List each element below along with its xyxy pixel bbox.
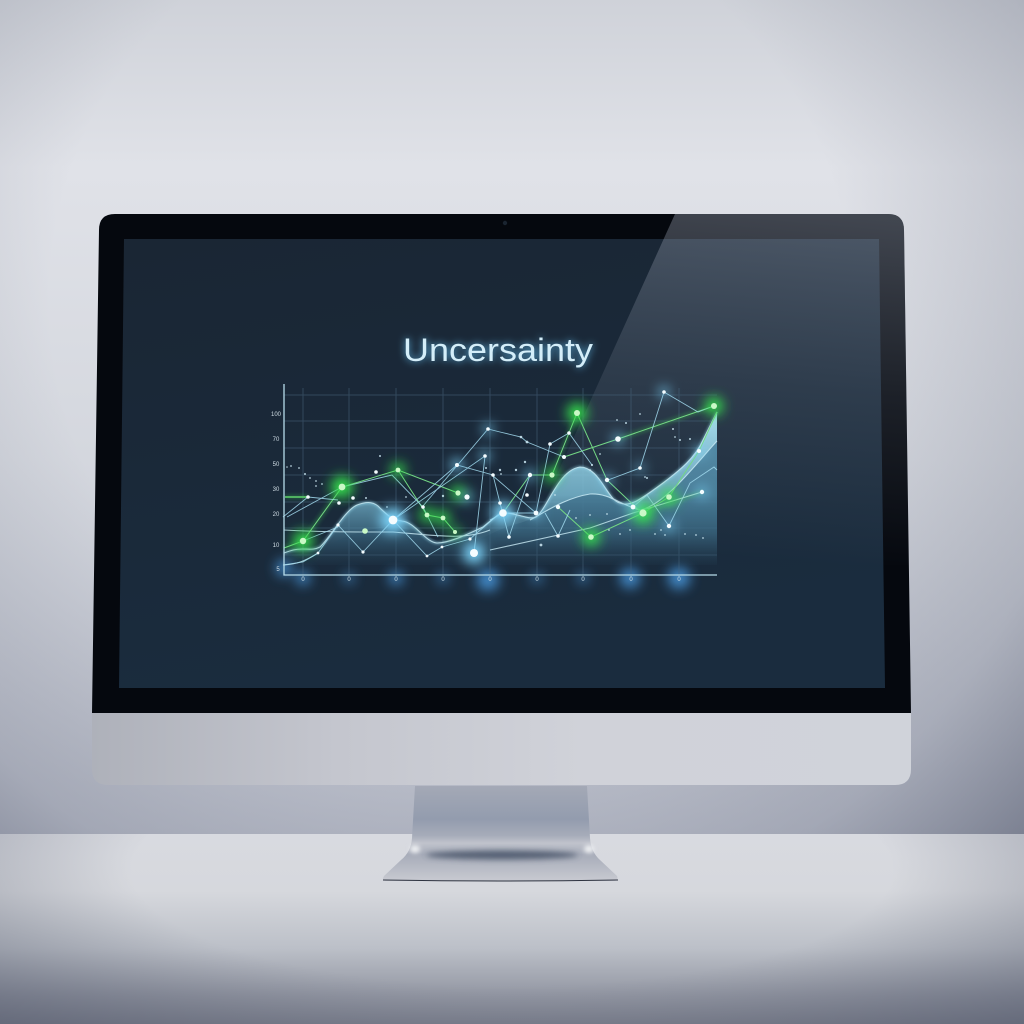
grid lines (284, 388, 717, 575)
y-axis labels: 70 (273, 437, 280, 443)
x-axis labels: 0 (677, 577, 681, 583)
green nodes (300, 403, 717, 544)
screen (119, 239, 885, 688)
line chart (271, 384, 723, 591)
x-axis labels: 0 (629, 577, 633, 583)
y-axis labels: 100 (271, 412, 282, 418)
title: Uncersainty (403, 332, 593, 368)
webcam (503, 221, 507, 225)
x-axis labels: 0 (394, 577, 398, 583)
stand neck and base (383, 786, 618, 881)
x-axis labels: 0 (441, 577, 445, 583)
y-axis labels (271, 412, 282, 573)
area outlines (284, 412, 717, 565)
axes (284, 384, 717, 575)
green glows under lines (284, 406, 714, 548)
title: Uncersainty (403, 332, 593, 368)
x-axis labels: 0 (301, 577, 305, 583)
screen glare (516, 214, 909, 565)
desk surface (0, 834, 1024, 1024)
x-axis base glows (276, 560, 690, 591)
x-axis labels: 0 (581, 577, 585, 583)
y-axis labels: 30 (273, 487, 280, 493)
y-axis labels: 50 (273, 462, 280, 468)
monitor bezel (92, 214, 911, 713)
monitor chin (92, 712, 911, 785)
front area (284, 441, 717, 565)
data nodes (300, 390, 717, 557)
x-axis labels: 0 (535, 577, 539, 583)
green series (284, 406, 717, 548)
back area (284, 412, 717, 565)
area outline glow (284, 412, 717, 553)
y-axis labels: 5 (276, 567, 280, 573)
white-blue nodes (306, 390, 704, 557)
small scattered dots (286, 413, 704, 546)
y-axis labels: 20 (273, 512, 280, 518)
x-axis labels: 0 (347, 577, 351, 583)
monitor stand (383, 786, 618, 881)
blue-white series (283, 392, 717, 565)
y-axis labels: 10 (273, 543, 280, 549)
x-axis labels (301, 577, 681, 583)
node glows (293, 397, 723, 551)
stand shadow band (426, 850, 578, 860)
monitor (92, 214, 911, 785)
x-axis labels: 0 (488, 577, 492, 583)
stand highlights (383, 845, 618, 881)
